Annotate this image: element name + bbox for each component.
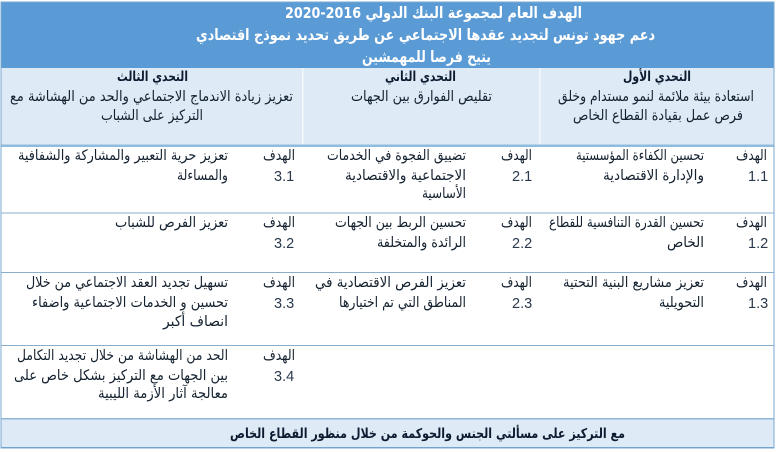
panel: header banner: يتيح فرصا للمهمشين: [362, 48, 491, 66]
panel: goal 2.3: تعزيز الفرص الاقتصادية في: [315, 275, 466, 291]
panel: goal 1.2: الخاص: [667, 235, 704, 251]
panel: goal 1.2: الهدف: [736, 215, 767, 231]
panel: goal 1.3: التحويلية: [659, 295, 704, 311]
panel: challenge two: [351, 69, 492, 105]
panel: goal 3.4: الحد من الهشاشة من خلال تجديد التكامل: [17, 348, 228, 364]
panel: challenge one: التحدي الأول: [623, 68, 691, 85]
panel: goal 2.1: [327, 148, 532, 202]
panel: goal 3.1: 3.1: [274, 169, 294, 185]
panel: goal 2.2: الرائدة والمتخلفة: [377, 235, 466, 251]
panel: goal 1.3: 1.3: [748, 296, 768, 312]
panel: goal 3.3: انصاف أكبر: [162, 311, 228, 330]
panel: challenge three: التحدي الثالث: [117, 69, 188, 85]
panel: goal 2.1: الهدف: [501, 148, 532, 164]
panel: goal 2.1: تضييق الفجوة في الخدمات: [327, 148, 466, 164]
panel: goal 2.1: الاجتماعية والاقتصادية: [345, 168, 466, 184]
panel: goal 1.3: [563, 275, 768, 312]
panel: goal 3.2: [115, 215, 295, 252]
panel: goal 3.2: 3.2: [274, 236, 294, 252]
panel: goal 2.3: 2.3: [512, 296, 532, 312]
panel: goal 1.2: [549, 215, 768, 252]
panel: goal 3.4: [14, 348, 295, 402]
panel: goal 3.2: الهدف: [263, 215, 295, 231]
panel: goal 2.3: المناطق التي تم اختيارها: [339, 295, 466, 311]
panel: goal 3.3: 3.3: [274, 296, 294, 312]
panel: header banner: [1, 2, 774, 68]
panel: goal 1.2: 1.2: [748, 236, 768, 252]
panel: challenge one: فرص عمل بقيادة القطاع الخاص: [573, 108, 743, 124]
panel: goal 2.3: الهدف: [501, 275, 532, 291]
panel: challenge three: التركيز على الشباب: [101, 108, 203, 124]
panel: goal 3.3: الهدف: [263, 275, 295, 291]
panel: goal 1.3: تعزيز مشاريع البنية التحتية: [563, 275, 704, 291]
panel: challenge one: [558, 68, 754, 124]
panel: goal 1.1: 1.1: [748, 169, 768, 185]
panel: header banner: دعم جهود تونس لتجديد عقدها الاجتماعي عن طريق تحديد نموذج اقتصادي: [196, 26, 655, 45]
panel: goal 3.1: الهدف: [263, 148, 295, 164]
panel: goal 1.3: الهدف: [736, 275, 767, 291]
panel: goal 1.1: والإدارة الاقتصادية: [603, 168, 704, 184]
panel: goal 3.2: تعزيز الفرص للشباب: [115, 215, 228, 231]
panel: challenge two: التحدي الثاني: [385, 69, 456, 85]
panel: goal 3.1: تعزيز حرية التعبير والمشاركة والشفافية: [18, 148, 228, 164]
panel: goal 2.1: الأساسية: [422, 184, 466, 202]
panel: goal 1.1: [576, 148, 768, 185]
panel: goal 3.1: والمساءلة: [177, 168, 228, 184]
panel: goal 3.4: الهدف: [263, 348, 295, 364]
panel: goal 1.1: تحسين الكفاءة المؤسستية: [576, 148, 704, 164]
panel: goal 3.4: بين الجهات مع التركيز بشكل خاص على: [14, 368, 228, 384]
panel: goal 2.2: تحسين الربط بين الجهات: [335, 215, 466, 231]
panel: challenge three: [10, 69, 293, 124]
panel: goal 2.1: 2.1: [512, 169, 532, 185]
panel: goal 3.4: 3.4: [274, 369, 294, 385]
panel: goal 2.2: 2.2: [512, 236, 532, 252]
panel: goal 3.3: [26, 275, 295, 330]
panel: footer cross-cutting theme: مع التركيز على مسألتي الجنس والحوكمة من خلال منظور القطاع الخاص: [230, 425, 625, 442]
panel: goal 3.4: معالجة آثار الأزمة الليبية: [98, 384, 228, 402]
panel: goal 1.1: الهدف: [736, 148, 767, 164]
panel: goal 2.3: [315, 275, 532, 312]
panel: goal 1.2: تحسين القدرة التنافسية للقطاع: [549, 215, 704, 231]
panel: challenge three: تعزيز زيادة الاندماج الاجتماعي والحد من الهشاشة مع: [10, 89, 293, 106]
panel: footer cross-cutting theme: [1, 419, 774, 447]
panel: goal 2.2: [335, 215, 532, 252]
panel: goal 3.3: تحسين و الخدمات الاجتماعية واضفاء: [32, 295, 228, 311]
panel: header banner: الهدف العام لمجموعة البنك الدولي 2016-2020: [285, 4, 582, 23]
panel: goal 3.1: [18, 148, 295, 185]
panel: goal 2.2: الهدف: [501, 215, 532, 231]
panel: challenge headers background: [1, 68, 774, 145]
panel: challenge two: تقليص الفوارق بين الجهات: [351, 89, 492, 105]
panel: goal 3.3: تسهيل تجديد العقد الاجتماعي من خلال: [26, 275, 228, 291]
